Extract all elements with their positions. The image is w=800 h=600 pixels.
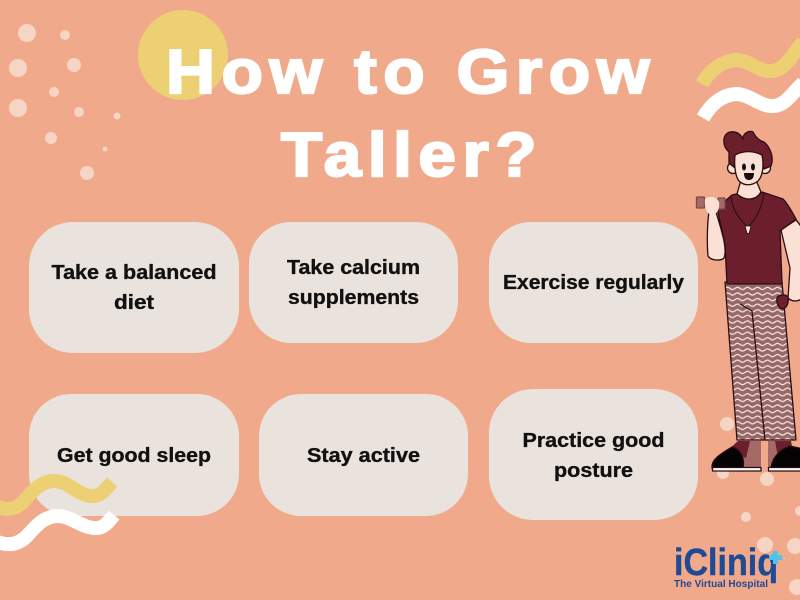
sock left (728, 441, 750, 458)
wave: top right (702, 42, 800, 118)
card: balanced diet: diet (114, 292, 154, 314)
mouth (744, 173, 754, 180)
card: stay active (259, 394, 468, 516)
wave: bottom left (0, 481, 114, 544)
card: stay active: Stay active (307, 445, 420, 467)
card: calcium supplements: supplements (288, 287, 419, 309)
hair (724, 131, 772, 169)
card: exercise regularly: Exercise regularly (503, 272, 685, 294)
ears (728, 162, 738, 174)
shirt (717, 192, 796, 284)
shoe left (712, 447, 744, 468)
face (735, 152, 763, 185)
card: balanced diet: Take a balanced (52, 262, 216, 284)
neck (737, 180, 761, 199)
card: good posture: Practice good (522, 430, 664, 452)
sole right (768, 468, 800, 471)
logo tagline: The Virtual Hospital (674, 578, 768, 590)
trousers (725, 282, 796, 440)
card: calcium supplements (249, 222, 458, 343)
card: balanced diet (29, 222, 239, 353)
eyes (742, 164, 746, 170)
title: Taller? (281, 121, 543, 190)
card: good posture: posture (554, 460, 633, 482)
logo: iCliniq: iCliniq (674, 542, 778, 584)
dumbbell lower (777, 295, 788, 309)
dumbbell upper (696, 197, 725, 209)
trouser seam (740, 304, 765, 440)
sock right (775, 441, 793, 457)
ankle right (768, 441, 780, 468)
decorative dots: bottom right (717, 417, 800, 595)
right arm (781, 220, 800, 301)
logo plus (769, 551, 782, 564)
card: good posture (489, 389, 698, 520)
sole left (712, 468, 761, 471)
card: good sleep (29, 394, 239, 516)
card: exercise regularly (489, 222, 698, 343)
illustration: man with dumbbells (696, 131, 800, 471)
title (166, 38, 656, 190)
card: good sleep: Get good sleep (57, 445, 211, 467)
hand (705, 197, 719, 215)
ankle left (741, 441, 761, 468)
title: How to Grow (166, 38, 656, 107)
decorative dots: top left (9, 24, 120, 180)
yellow circle behind title (138, 10, 228, 100)
left arm (707, 212, 725, 260)
necklace (731, 193, 764, 227)
card: calcium supplements: Take calcium (287, 257, 420, 279)
shoe right (771, 446, 800, 468)
pendant (745, 226, 751, 234)
